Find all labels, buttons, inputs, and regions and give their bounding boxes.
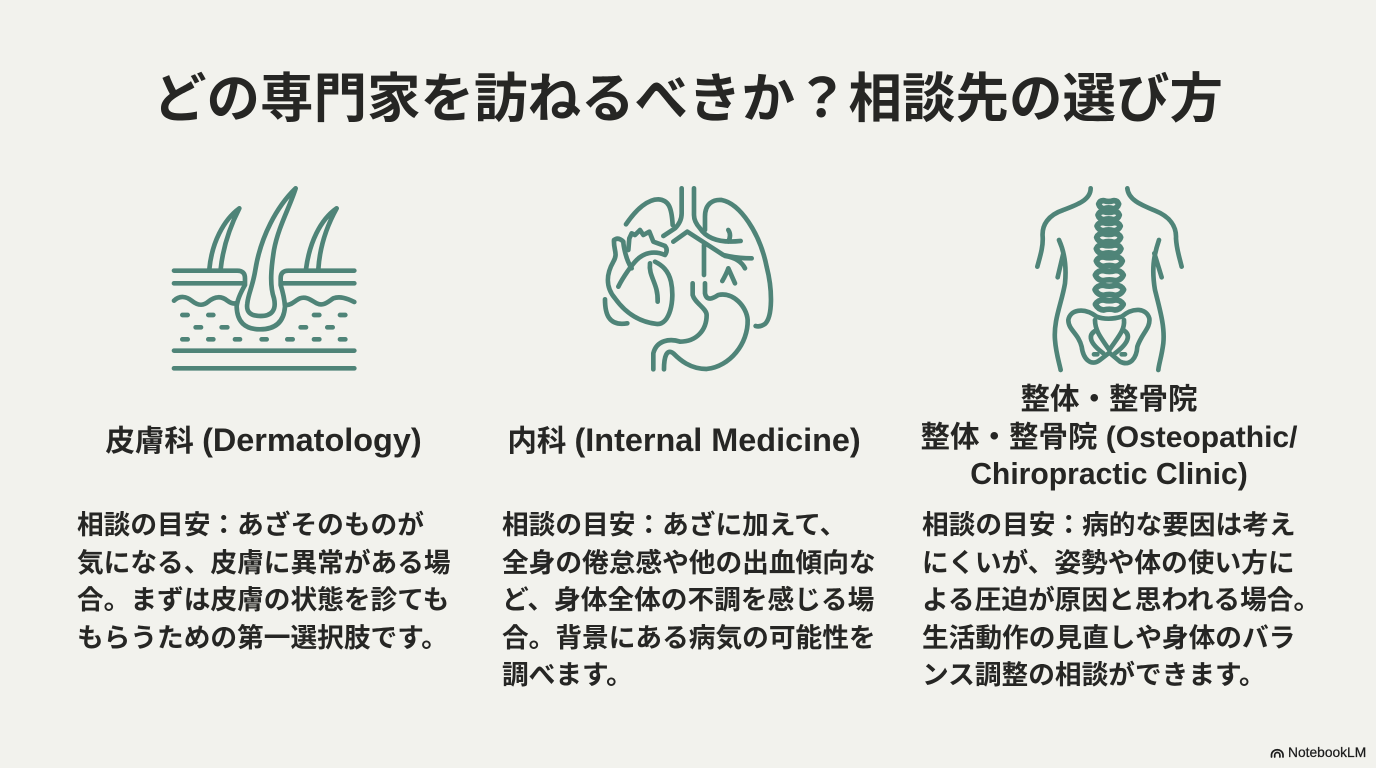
icon: skin and hair follicle (174, 188, 354, 368)
heading: internal medicine: 内科 (Internal Medicine) (507, 422, 861, 458)
heading: osteopathic clinic: 整体・整骨院 (1020, 383, 1198, 416)
text: internal medicine guidance: 全身の倦怠感や他の出血傾向な (502, 548, 876, 578)
icon: spine and pelvis (1037, 188, 1182, 370)
text: internal medicine guidance: ど、身体全体の不調を感じる場 (502, 585, 874, 615)
text: dermatology guidance (77, 510, 451, 653)
text: dermatology guidance: 合。まずは皮膚の状態を診ても (77, 585, 449, 615)
text: dermatology guidance: 気になる、皮膚に異常がある場 (77, 548, 451, 578)
icon: internal organs (605, 188, 771, 369)
text: internal medicine guidance: 相談の目安：あざに加えて、 (502, 510, 846, 540)
text: osteopathic guidance: ンス調整の相談ができます。 (922, 660, 1266, 690)
heading: osteopathic clinic: 整体・整骨院 (Osteopathic/ (921, 420, 1297, 454)
text: osteopathic guidance: にくいが、姿勢や体の使い方に (922, 548, 1295, 578)
text: osteopathic guidance: 相談の目安：病的な要因は考え (922, 510, 1296, 540)
icon: NotebookLM logo (1272, 750, 1283, 757)
text: internal medicine guidance: 合。背景にある病気の可能性を (502, 623, 876, 653)
text: osteopathic guidance: 生活動作の見直しや身体のバラ (922, 623, 1295, 653)
heading: dermatology: 皮膚科 (Dermatology) (105, 422, 422, 458)
text: osteopathic guidance (922, 510, 1320, 690)
NotebookLM wordmark: NotebookLM (1288, 745, 1366, 760)
title: どの専門家を訪ねるべきか？相談先の選び方 (153, 70, 1223, 129)
text: dermatology guidance: 相談の目安：あざそのものが (77, 510, 424, 540)
heading: osteopathic clinic: Chiropractic Clinic) (970, 458, 1248, 491)
text: internal medicine guidance: 調べます。 (502, 660, 633, 690)
text: dermatology guidance: もらうための第一選択肢です。 (77, 623, 448, 653)
text: osteopathic guidance: よる圧迫が原因と思われる場合。 (922, 585, 1320, 615)
heading: osteopathic clinic (921, 383, 1298, 491)
text: internal medicine guidance (502, 510, 876, 690)
